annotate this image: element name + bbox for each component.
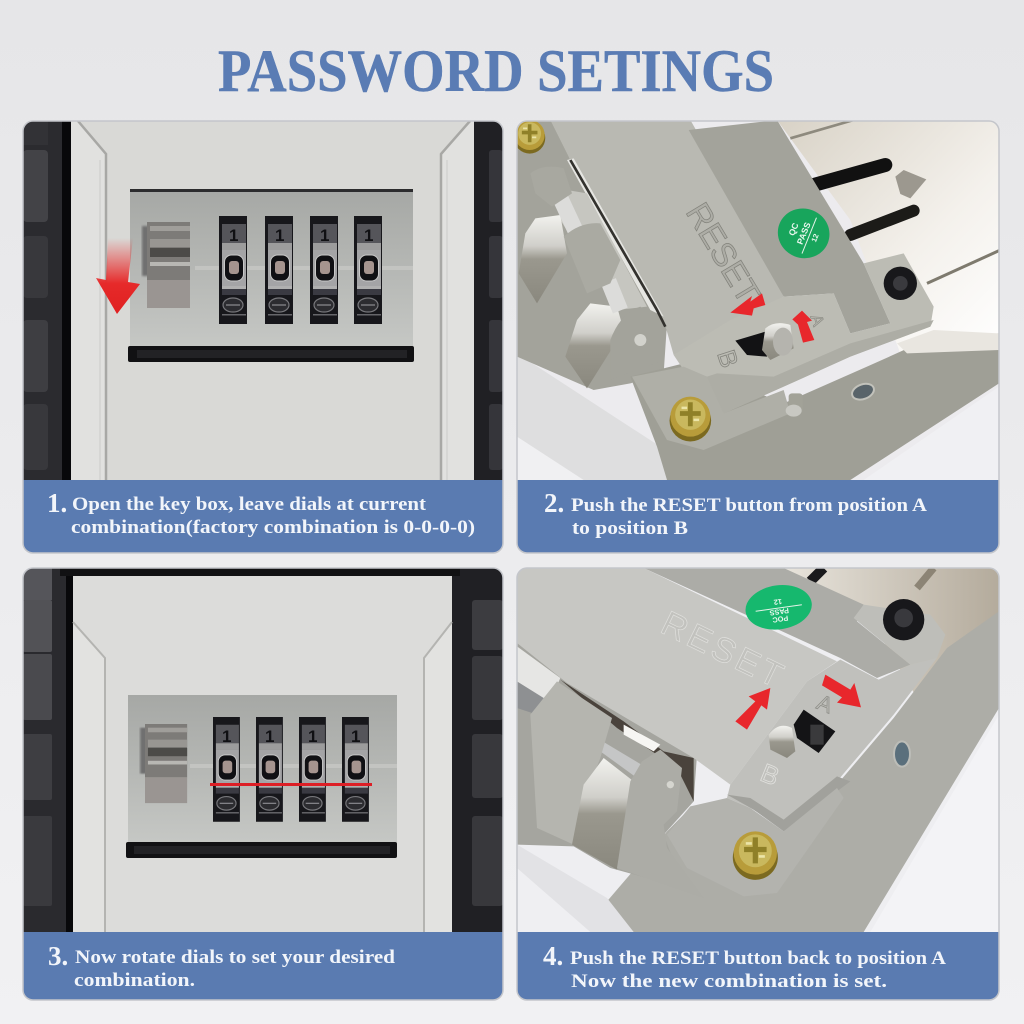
caption bar 3: Now rotate dials to set your desired bbox=[75, 948, 396, 968]
grey face plate bbox=[71, 121, 474, 480]
caption bar 2: Push the RESET button from position A bbox=[571, 496, 928, 516]
left knuckle bbox=[530, 681, 612, 845]
right knuckle bbox=[617, 750, 704, 898]
dial 3 bbox=[310, 216, 338, 324]
hinge 2 bbox=[564, 223, 646, 388]
lower tray bbox=[607, 611, 999, 932]
caption bar 1: 1. bbox=[47, 488, 67, 518]
top left gold screw bbox=[518, 122, 546, 154]
red arrow up right bbox=[735, 688, 770, 730]
black right side bbox=[452, 568, 503, 932]
front slider block bbox=[674, 254, 934, 396]
black rubber left side bbox=[23, 121, 71, 480]
panel: step 1 bbox=[23, 121, 503, 553]
grey face plate bbox=[60, 568, 460, 932]
caption bar 4: Push the RESET button back to position A bbox=[570, 949, 947, 969]
caption bar 3 bbox=[23, 932, 503, 1000]
cover bbox=[517, 568, 837, 785]
reset slot and pin bbox=[769, 710, 835, 758]
caption bar 1: Open the key box, leave dials at current bbox=[72, 495, 427, 515]
qc pass sticker bbox=[778, 208, 830, 258]
embossed letter a: A bbox=[807, 312, 828, 329]
reset slot and pin bbox=[735, 323, 794, 360]
qc pass sticker bbox=[743, 581, 815, 634]
icon: red down arrow bbox=[96, 238, 140, 314]
slider switch bbox=[140, 724, 187, 803]
grey lower tray bbox=[630, 333, 999, 480]
upper slab bbox=[689, 120, 890, 333]
upper slab bbox=[644, 568, 910, 678]
dial 2 bbox=[265, 216, 293, 324]
embossed letter b: B bbox=[756, 757, 784, 792]
metal tab bbox=[572, 758, 634, 870]
caption bar 1: combination(factory combination is 0-0-0-0) bbox=[71, 518, 475, 538]
caption bar 3: combination. bbox=[74, 971, 195, 991]
red arrow up bbox=[792, 311, 814, 343]
dial 3: 1 bbox=[320, 226, 329, 245]
dial 2 bbox=[256, 717, 283, 822]
panel: step 2 bbox=[514, 120, 999, 553]
caption bar 1 bbox=[23, 480, 503, 553]
steel plate bbox=[784, 568, 999, 700]
tray front corner bbox=[667, 788, 844, 896]
hinge shadow bbox=[517, 641, 697, 888]
silver strip along hinge bbox=[567, 158, 664, 317]
dark edge strip bbox=[570, 160, 665, 327]
caption bar 4 bbox=[517, 932, 999, 1000]
qc pass sticker: 12 bbox=[809, 232, 821, 243]
dial window bbox=[128, 189, 414, 362]
panel: step 3 bbox=[23, 568, 503, 1000]
pale surface bottom left bbox=[517, 845, 634, 932]
qc pass sticker: PASS bbox=[795, 221, 813, 246]
dial 2: 1 bbox=[275, 226, 284, 245]
caption bar 3: 3. bbox=[48, 941, 68, 971]
qc pass sticker: 12 bbox=[773, 597, 783, 607]
small bolt bbox=[786, 393, 803, 417]
slider switch bbox=[142, 222, 190, 308]
black hex screw bbox=[883, 599, 924, 640]
dial 3: 1 bbox=[308, 727, 317, 746]
caption bar 2 bbox=[517, 480, 999, 553]
panel: step 4 bbox=[517, 568, 999, 1000]
black torx screw bbox=[884, 267, 917, 300]
dial 3 bbox=[299, 717, 326, 822]
side blue screw bbox=[851, 382, 875, 400]
black left side bbox=[23, 568, 73, 932]
steel plate bbox=[777, 120, 999, 353]
title: PASSWORD SETINGS bbox=[218, 38, 774, 104]
reset embossed lettering: RESET bbox=[655, 604, 789, 696]
white surface bottom right bbox=[870, 715, 999, 932]
dial 1: 1 bbox=[229, 226, 238, 245]
dial 4: 1 bbox=[351, 727, 360, 746]
embossed letter a: A bbox=[813, 689, 837, 718]
dial 1: 1 bbox=[222, 727, 231, 746]
red arrow down right bbox=[822, 675, 861, 707]
hinge background bbox=[560, 190, 647, 310]
caption bar 2: to position B bbox=[572, 519, 688, 539]
caption bar 4: 4. bbox=[543, 941, 563, 971]
metal rod left bbox=[517, 646, 694, 801]
front slider block bbox=[727, 658, 937, 828]
dial 1 bbox=[213, 717, 240, 822]
tray front corner bbox=[632, 367, 790, 450]
qc pass sticker: QC bbox=[786, 221, 801, 237]
red alignment line bbox=[210, 783, 372, 786]
hinge 1 bbox=[518, 190, 582, 303]
embossed letter b: B bbox=[711, 347, 743, 371]
pale tray base bbox=[517, 353, 677, 480]
side blue screw bbox=[894, 741, 910, 767]
dial 2: 1 bbox=[265, 727, 274, 746]
dial 4 bbox=[342, 717, 369, 822]
dial 4: 1 bbox=[364, 226, 373, 245]
red arrow left bbox=[730, 293, 765, 316]
gold screw bbox=[670, 397, 711, 441]
caption bar 2: 2. bbox=[544, 488, 564, 518]
reset embossed lettering: RESET bbox=[678, 197, 767, 310]
dial 1 bbox=[219, 216, 247, 324]
qc pass sticker: POC bbox=[771, 613, 789, 625]
caption bar 4: Now the new combination is set. bbox=[571, 972, 887, 992]
black rubber right side bbox=[474, 121, 503, 480]
gold screw bbox=[733, 831, 778, 880]
dial window bbox=[126, 695, 397, 858]
cover light bbox=[550, 120, 784, 355]
left base area bbox=[517, 120, 667, 390]
dial 4 bbox=[354, 216, 382, 324]
qc pass sticker: PASS bbox=[769, 606, 790, 618]
